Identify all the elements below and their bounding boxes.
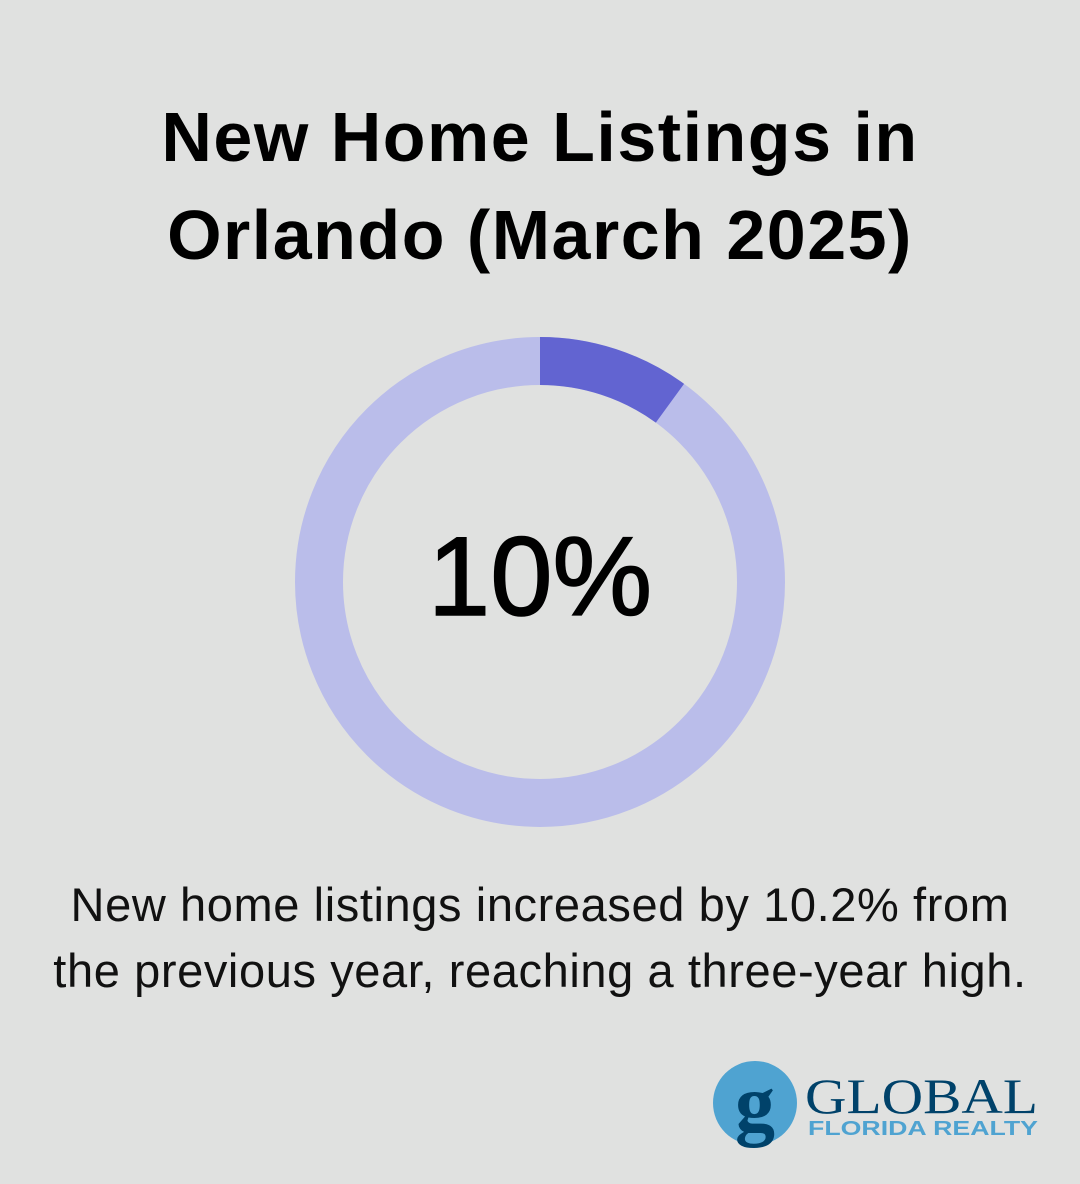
description text: the previous year, reaching a three-year high.	[53, 944, 1027, 997]
title: Orlando (March 2025)	[167, 196, 913, 274]
description text: New home listings increased by 10.2% from	[71, 878, 1009, 931]
logo: GLOBAL	[805, 1068, 1038, 1124]
logo	[713, 1060, 1039, 1148]
title	[161, 98, 919, 274]
title: New Home Listings in	[161, 98, 919, 176]
logo: FLORIDA REALTY	[808, 1118, 1039, 1140]
description text	[53, 878, 1027, 997]
logo: g	[735, 1060, 775, 1148]
donut chart: 10%	[428, 514, 652, 639]
